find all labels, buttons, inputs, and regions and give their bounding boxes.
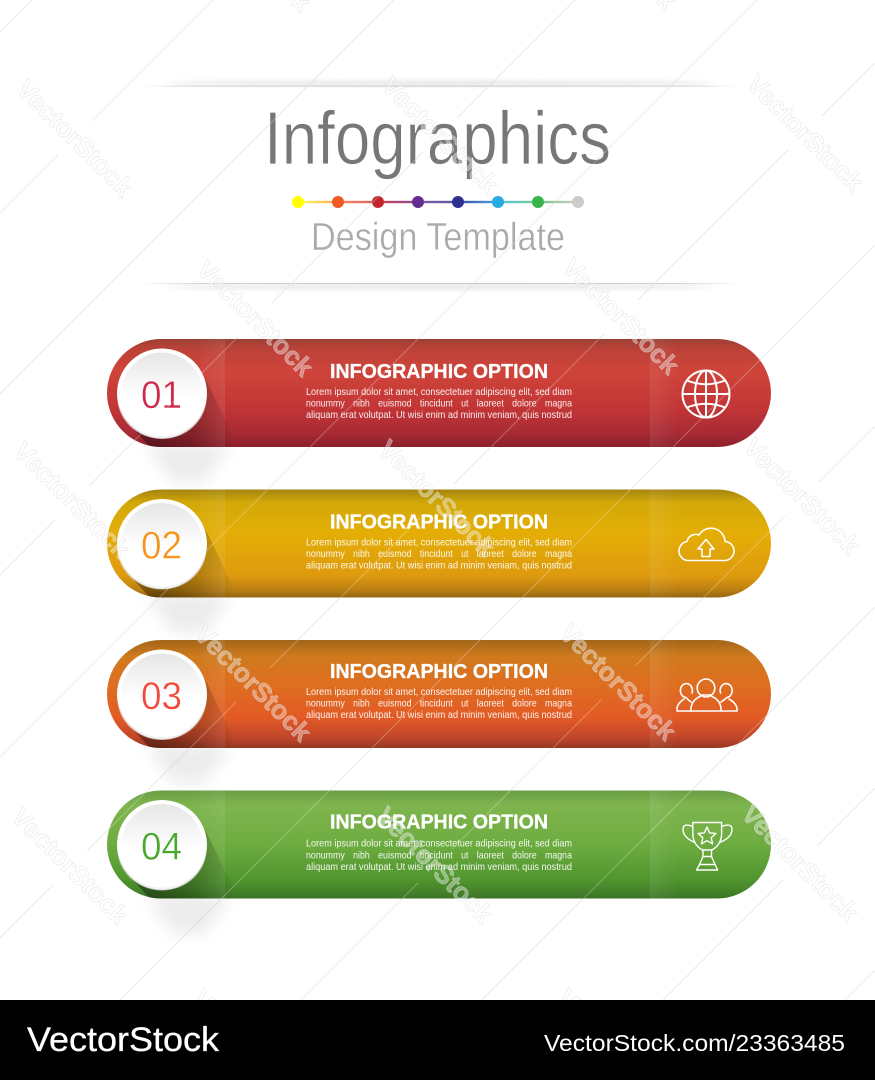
footer bar (0, 1000, 875, 1080)
watermarks: VectorStock (741, 69, 870, 198)
number disc 04: 04 (141, 826, 182, 868)
light bands 04 (125, 790, 678, 898)
panel: option 01 (107, 339, 771, 482)
body text 04: Lorem ipsum dolor sit amet, consectetuer adipiscing elit, sed diam (306, 838, 572, 850)
watermarks: VectorStock (736, 799, 865, 928)
drop shadow 01 (146, 443, 232, 482)
body text 04: nonummy nibh euismod tincidunt ut laoreet dolore magna (306, 850, 572, 862)
icon: trophy (683, 822, 732, 870)
body text 02: Lorem ipsum dolor sit amet, consectetuer adipiscing elit, sed diam (306, 536, 572, 548)
title: Infographics (264, 96, 611, 180)
body text 03: aliquam erat volutpat. Ut wisi enim ad minim veniam, quis nostrud (306, 709, 572, 721)
panel: option 03 (107, 640, 771, 783)
watermarks: VectorStock (738, 432, 867, 561)
body text 04: aliquam erat volutpat. Ut wisi enim ad minim veniam, quis nostrud (306, 861, 572, 873)
light bands 03 (125, 640, 678, 748)
drop shadow 03 (146, 744, 232, 783)
bar 02 (107, 490, 771, 598)
footer logo: VectorStock (27, 1021, 220, 1059)
drop shadow 02 (146, 594, 232, 632)
light bands 01 (125, 339, 678, 447)
watermarks: VectorStock (11, 74, 140, 203)
watermarks: VectorStock (6, 802, 135, 931)
watermarks: VectorStock (191, 254, 320, 383)
body text 02 (306, 536, 572, 572)
bar 04 (107, 790, 771, 898)
heading 01: INFOGRAPHIC OPTION (330, 361, 548, 383)
watermarks: VectorStock (373, 434, 502, 563)
panel: option 02 (107, 490, 771, 632)
colored dot line (292, 196, 584, 208)
number disc 03 (117, 650, 207, 740)
footer url: VectorStock.com/23363485 (544, 1030, 845, 1056)
number disc 01 (117, 348, 207, 439)
icon: cloud upload (679, 528, 734, 561)
number disc 01: 01 (141, 374, 182, 417)
number disc 02: 02 (141, 524, 182, 568)
body text 04 (306, 838, 572, 873)
body text 03: nonummy nibh euismod tincidunt ut laoreet dolore magna (306, 698, 572, 710)
watermarks: VectorStock (189, 619, 318, 748)
subtitle: Design Template (311, 216, 565, 259)
heading 02: INFOGRAPHIC OPTION (330, 512, 548, 534)
number disc 02 (117, 499, 207, 590)
bar 01 (107, 339, 771, 447)
drop shadow 04 (146, 894, 232, 934)
body text 01: aliquam erat volutpat. Ut wisi enim ad minim veniam, quis nostrud (306, 409, 572, 421)
heading 04: INFOGRAPHIC OPTION (330, 812, 548, 834)
watermarks: VectorStock (557, 252, 686, 381)
body text 01: Lorem ipsum dolor sit amet, consectetuer adipiscing elit, sed diam (306, 386, 572, 398)
body text 03: Lorem ipsum dolor sit amet, consectetuer adipiscing elit, sed diam (306, 686, 572, 698)
body text 03 (306, 686, 572, 721)
body text 02: aliquam erat volutpat. Ut wisi enim ad minim veniam, quis nostrud (306, 560, 572, 572)
icon: globe (682, 370, 730, 418)
body text 01: nonummy nibh euismod tincidunt ut laoreet dolore magna (306, 398, 572, 410)
bar 03 (107, 640, 771, 748)
watermarks: VectorStock (376, 71, 505, 200)
heading 03: INFOGRAPHIC OPTION (330, 661, 548, 683)
light bands 02 (125, 490, 678, 598)
panel: option 04 (107, 790, 771, 934)
icon: people (677, 679, 737, 711)
watermarks: VectorStock (554, 618, 683, 747)
number disc 04 (117, 800, 207, 890)
header top divider (140, 80, 740, 87)
number disc 03: 03 (141, 675, 182, 718)
header bottom divider (140, 283, 740, 290)
watermarks: VectorStock (8, 436, 137, 565)
body text 01 (306, 386, 572, 421)
watermarks: VectorStock (371, 801, 500, 930)
body text 02: nonummy nibh euismod tincidunt ut laoreet dolore magna (306, 548, 572, 560)
